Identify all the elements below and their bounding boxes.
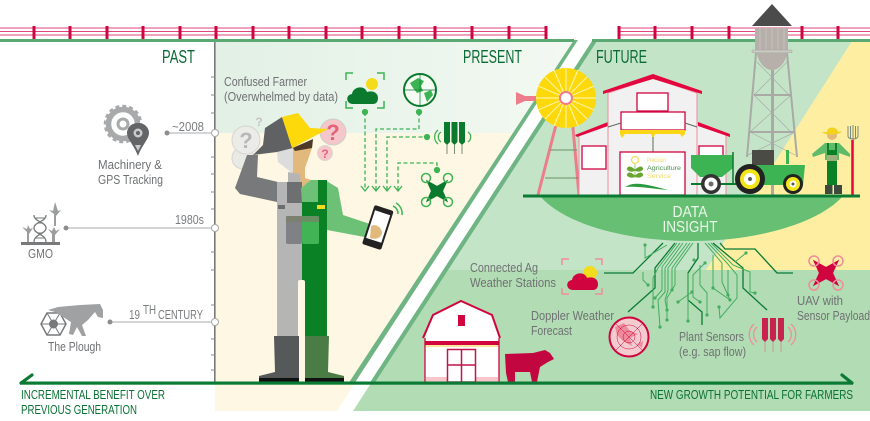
pockets: [286, 216, 302, 244]
boots: [259, 336, 299, 382]
label: UAV with sensor payload: UAV with: [797, 294, 843, 308]
icon: red wheat with signal: [749, 318, 796, 352]
timeline marker: 1980s: 1980s: [175, 213, 204, 227]
face: [277, 148, 299, 173]
question bubbles pink: ?: [326, 120, 340, 145]
grey raised arm: [235, 155, 278, 202]
label: incremental benefit: PREVIOUS GENERATION: [21, 402, 137, 417]
label: data insight: [662, 204, 718, 236]
label: doppler weather forecast: Forecast: [531, 324, 572, 338]
icon: wheat with signal: [435, 122, 471, 154]
circuit traces: [604, 243, 793, 329]
cap: [253, 117, 293, 155]
label: incremental benefit: INCREMENTAL BENEFIT OVER: [21, 387, 165, 402]
label: plant sensors: [679, 330, 746, 359]
label: connected ag weather stations: Weather Stations: [470, 276, 556, 290]
label: data insight: DATA: [672, 204, 708, 221]
label: incremental benefit: [21, 387, 165, 417]
hand: [370, 225, 382, 239]
icon: plough and horse: [41, 304, 103, 336]
shirt left: [277, 182, 302, 222]
logo: [632, 156, 638, 164]
label: confused farmer: Confused Farmer: [224, 75, 307, 89]
wifi: [393, 203, 402, 215]
timeline marker: 2008: [164, 120, 212, 136]
question bubbles grey: [232, 115, 263, 169]
windmill: [516, 68, 596, 195]
fence: right: [592, 26, 870, 42]
icon: gear and GPS pin: [105, 106, 149, 156]
icon: doppler radar: [610, 318, 648, 356]
timeline axis: [211, 42, 218, 383]
label: machinery and GPS: GPS Tracking: [98, 173, 163, 187]
main: [608, 78, 697, 195]
label: GMO: GMO: [28, 247, 53, 261]
question bubbles grey: ?: [255, 115, 263, 129]
label: plant sensors: (e.g. sap flow): [679, 345, 746, 359]
panel: future background: [353, 41, 870, 411]
overalls left: [277, 182, 302, 336]
label: machinery and GPS: [98, 158, 163, 187]
label: UAV with sensor payload: [797, 294, 870, 323]
growth arrow: [20, 375, 853, 385]
label: connected ag weather stations: [470, 261, 556, 290]
tractor: [735, 150, 805, 194]
heading: future: FUTURE: [596, 47, 647, 67]
timeline marker: 1980s: [64, 213, 212, 230]
barn: Precision Agriculture Service: Precision: [647, 158, 666, 164]
label: plant sensors: Plant Sensors: [679, 330, 744, 344]
barn: Precision Agriculture Service: Service: [647, 174, 672, 180]
icon: globe: [404, 74, 436, 106]
panel: present background: [215, 40, 578, 411]
label: data insight: INSIGHT: [662, 219, 718, 236]
question bubbles pink: [318, 119, 346, 161]
overalls right: [302, 180, 327, 336]
ground platform and dome: [523, 194, 860, 241]
timeline marker: 19th century: CENTURY: [158, 308, 203, 322]
data flow dashed lines: [361, 110, 440, 191]
label: the plough: The Plough: [48, 340, 101, 354]
barn: Precision Agriculture Service: Agriculture: [647, 166, 682, 172]
timeline marker: 19th century: [108, 303, 212, 324]
heading: present: PRESENT: [463, 47, 522, 67]
label: doppler weather forecast: Doppler Weather: [531, 309, 614, 323]
timeline marker: 19th century: 19: [129, 308, 140, 322]
label: doppler weather forecast: [531, 309, 614, 338]
label: machinery and GPS: Machinery &: [98, 158, 163, 172]
small farmer with pitchfork: [812, 125, 858, 195]
water tower: [747, 4, 797, 195]
fence: left: [0, 26, 574, 42]
barn: Precision Agriculture Service: [575, 74, 730, 195]
cow: [505, 350, 554, 382]
label: confused farmer: (Overwhelmed by data): [224, 90, 338, 104]
icon: red drone: [809, 256, 843, 290]
small red barn: [423, 301, 500, 382]
timeline marker: 2008: ~2008: [172, 120, 204, 134]
icon: weather cloud in frame: [346, 73, 384, 108]
label: confused farmer: [224, 75, 338, 104]
icon: GMO DNA and crops: [21, 202, 61, 245]
icon: red weather station: [562, 259, 602, 294]
question bubbles pink: ?: [321, 147, 329, 161]
right wing: [697, 123, 726, 195]
left wing: [579, 123, 608, 195]
shirt right: [301, 180, 373, 238]
leg gap: [298, 280, 305, 382]
heading: past: PAST: [162, 47, 195, 67]
wagon: [691, 152, 736, 194]
label: connected ag weather stations: Connected Ag: [470, 261, 538, 275]
question bubbles grey: ?: [239, 128, 253, 153]
phone: [362, 205, 394, 250]
icon: drone: [422, 174, 452, 206]
timeline marker: 19th century: TH: [143, 303, 156, 317]
confused farmer figure: [235, 113, 402, 382]
